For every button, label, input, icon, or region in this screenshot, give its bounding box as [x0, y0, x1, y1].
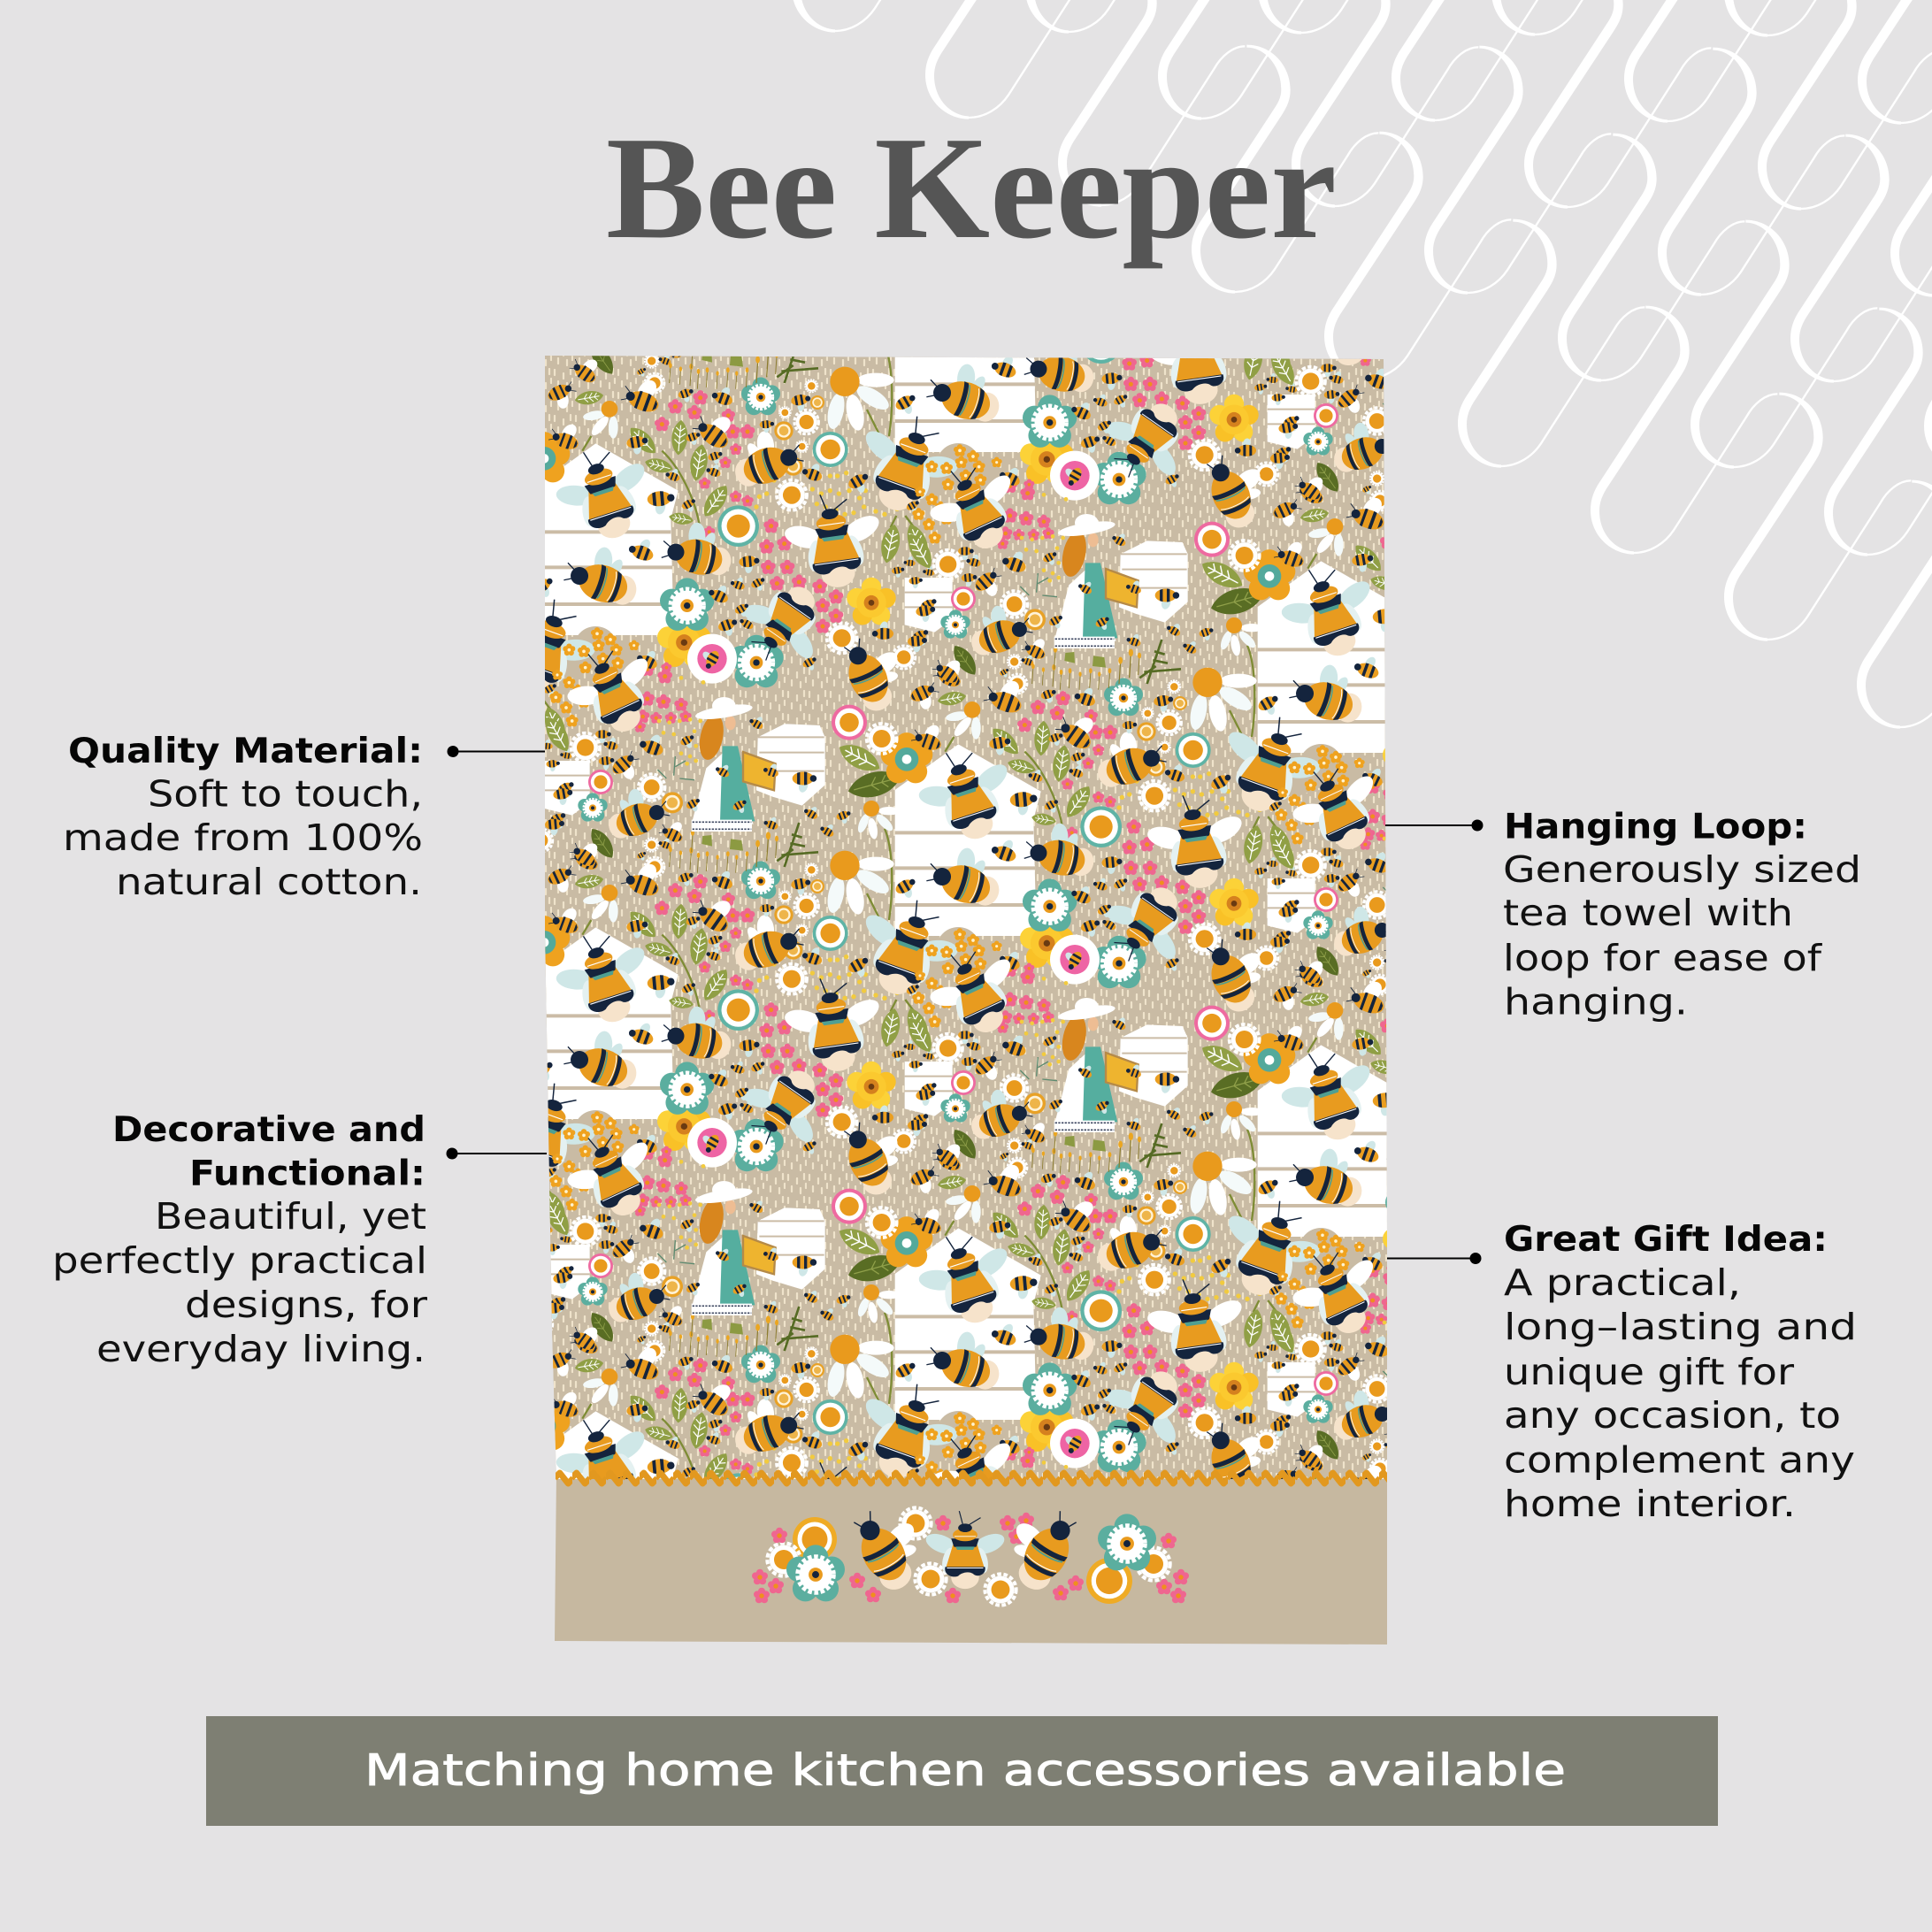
title: Bee Keeper — [606, 106, 1337, 269]
callout: great gift idea: complement any — [1504, 1438, 1855, 1481]
callout: decorative and functional: Decorative and — [112, 1110, 426, 1150]
callout: hanging loop — [1385, 807, 1861, 1023]
towel base — [545, 356, 1387, 1644]
callout: great gift idea: A practical, — [1504, 1261, 1741, 1304]
callout: quality material: Quality Material: — [68, 732, 423, 771]
callout: decorative and functional: everyday living. — [96, 1328, 426, 1370]
callout: decorative and functional: Functional: — [189, 1154, 426, 1194]
callout: hanging loop: Generously sized — [1503, 848, 1861, 891]
callout: hanging loop: hanging. — [1504, 980, 1688, 1023]
callout: decorative and functional: perfectly practical — [52, 1239, 427, 1282]
callout: quality material — [63, 732, 545, 903]
banner: Matching home kitchen accessories available — [364, 1745, 1566, 1796]
callout: great gift idea — [1387, 1220, 1857, 1525]
towel printed bee pattern — [545, 356, 1387, 1479]
callout: hanging loop: tea towel with — [1503, 892, 1793, 934]
callout: quality material: made from 100% — [63, 816, 423, 859]
callout: hanging loop: Hanging Loop: — [1504, 807, 1807, 847]
tea towel product — [545, 356, 1387, 1644]
rickrack trim — [556, 1468, 1387, 1488]
callout: quality material: natural cotton. — [116, 861, 422, 903]
callout: decorative and functional: Beautiful, yet — [155, 1195, 426, 1238]
callout: hanging loop: loop for ease of — [1503, 937, 1823, 979]
callout: quality material: Soft to touch, — [148, 773, 423, 816]
towel border motif — [752, 1496, 1189, 1606]
callout: great gift idea: any occasion, to — [1504, 1394, 1841, 1437]
callout: decorative and functional: designs, for — [185, 1284, 427, 1326]
callout: great gift idea: unique gift for — [1504, 1351, 1794, 1393]
callout: decorative and functional — [52, 1110, 547, 1370]
callout: great gift idea: home interior. — [1504, 1483, 1796, 1525]
banner — [206, 1716, 1718, 1826]
callout: great gift idea: long–lasting and — [1504, 1306, 1857, 1348]
decorative swirl pattern — [792, 0, 1932, 729]
callout: great gift idea: Great Gift Idea: — [1504, 1220, 1828, 1260]
